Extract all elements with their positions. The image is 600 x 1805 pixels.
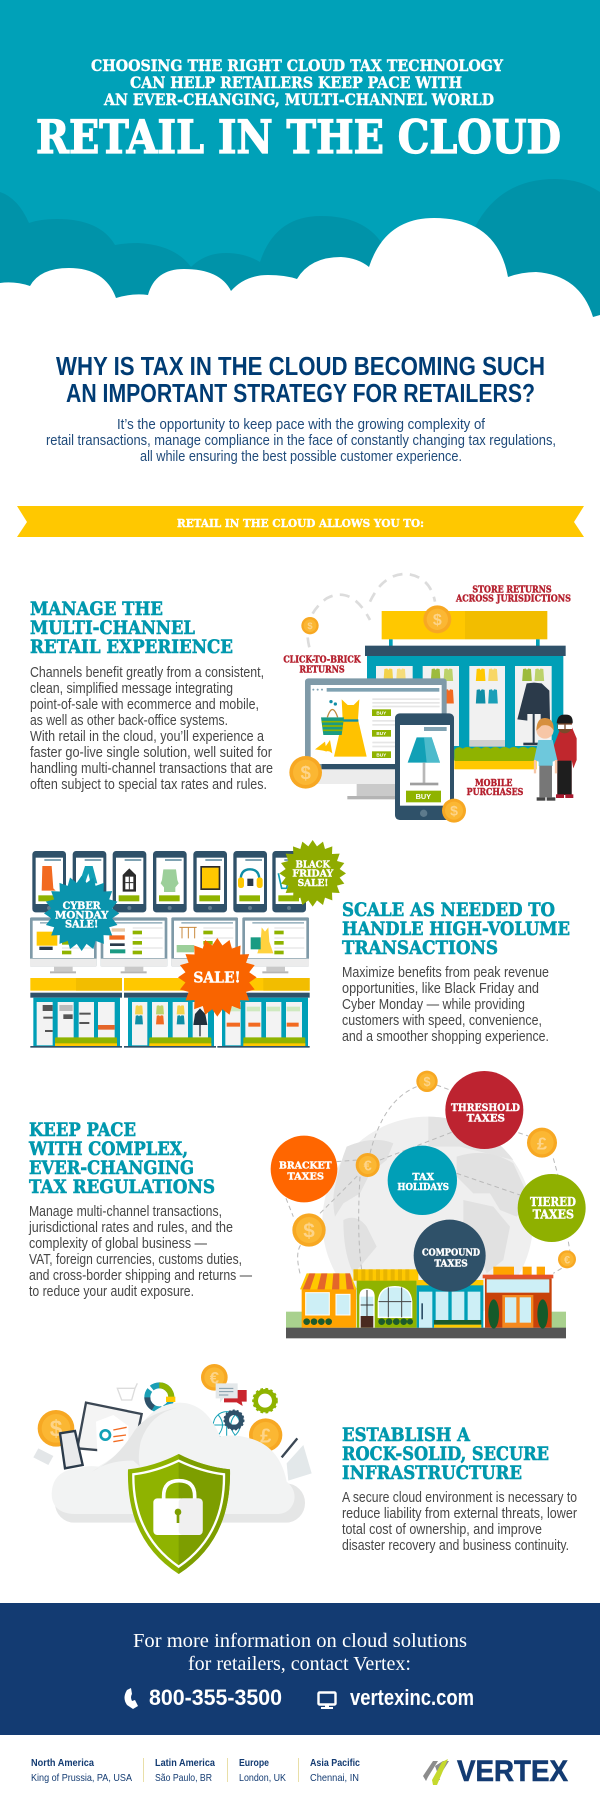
smartphone bbox=[395, 713, 454, 820]
section 2 body: and a smoother shopping experience. bbox=[342, 1029, 549, 1045]
globe bbox=[322, 1117, 533, 1327]
illustration: globe, tax bubbles and shops bbox=[271, 1071, 586, 1338]
europe: Europe bbox=[239, 1757, 269, 1769]
shop: green arched bbox=[353, 1269, 418, 1328]
desktop monitor: BUY bbox=[376, 752, 387, 757]
burst: black friday sale: FRIDAY bbox=[292, 869, 333, 880]
latin america bbox=[155, 1757, 215, 1784]
coins: $ bbox=[300, 762, 311, 783]
coins bbox=[292, 1071, 576, 1268]
label: store returns across jurisdictions: STORE RETURNS bbox=[472, 586, 552, 596]
section 4 text: establish bbox=[342, 1425, 577, 1554]
bubble: tiered taxes: TIERED bbox=[530, 1195, 576, 1209]
icon: monitor bbox=[318, 1692, 336, 1709]
section 1 body: as well as other back-office systems. bbox=[30, 713, 228, 729]
burst: sale bbox=[178, 938, 257, 1017]
section 4 heading: INFRASTRUCTURE bbox=[342, 1463, 522, 1484]
label: mobile purchases bbox=[467, 779, 523, 798]
contact text bbox=[133, 1630, 467, 1675]
section 1 body: Channels benefit greatly from a consistent, bbox=[30, 665, 264, 681]
row of phones bbox=[32, 851, 306, 912]
section 1 body: handling multi-channel transactions that are bbox=[30, 761, 273, 777]
cloud bbox=[52, 1403, 305, 1523]
subtitle: CHOOSING THE RIGHT CLOUD TAX TECHNOLOGY bbox=[91, 56, 504, 75]
section 4 heading: ESTABLISH A bbox=[342, 1425, 471, 1446]
section 2 text: scale as needed bbox=[342, 900, 570, 1045]
latin america: São Paulo, BR bbox=[155, 1772, 212, 1784]
heading: why tax in the cloud bbox=[56, 351, 545, 408]
section 1 text: manage the multi-channel retail experience bbox=[30, 599, 273, 793]
label: click-to-brick returns bbox=[283, 656, 362, 676]
desktop monitor: BUY bbox=[376, 731, 387, 736]
section 3 heading: WITH COMPLEX, bbox=[28, 1139, 188, 1160]
coins and floating icons: € bbox=[210, 1368, 219, 1387]
label: click-to-brick returns: CLICK-TO-BRICK bbox=[283, 656, 362, 666]
bubble: compound taxes bbox=[414, 1220, 486, 1292]
dashed connectors bbox=[286, 1085, 570, 1273]
bubble: tiered taxes bbox=[518, 1174, 586, 1242]
burst: cyber monday sale bbox=[44, 876, 119, 951]
section 1 body: clean, simplified message integrating bbox=[30, 681, 233, 697]
store sign bbox=[382, 611, 547, 646]
subtitle: AN EVER-CHANGING, MULTI-CHANNEL WORLD bbox=[103, 90, 494, 109]
coins: € bbox=[564, 1254, 570, 1266]
asia pacific bbox=[310, 1757, 360, 1784]
section 1 heading: MULTI-CHANNEL bbox=[30, 618, 195, 639]
bubble: compound taxes: COMPOUND bbox=[422, 1248, 480, 1259]
bubble: bracket taxes: BRACKET bbox=[279, 1161, 332, 1172]
section 2 body: Cyber Monday — while providing bbox=[342, 997, 525, 1013]
coins: £ bbox=[537, 1133, 547, 1153]
section 3 body bbox=[28, 1204, 252, 1300]
section 1 body: often subject to special tax rates and rules. bbox=[30, 777, 267, 793]
label: store returns across jurisdictions bbox=[455, 586, 571, 605]
burst: sale: SALE! bbox=[193, 969, 241, 987]
section 3 heading: KEEP PACE bbox=[29, 1120, 136, 1141]
burst: black friday sale: SALE! bbox=[298, 878, 328, 889]
section 3 heading bbox=[28, 1120, 215, 1198]
shield with lock bbox=[128, 1454, 230, 1574]
bubble: compound taxes: TAXES bbox=[434, 1259, 468, 1270]
section 1 heading: MANAGE THE bbox=[30, 599, 163, 620]
section 4 body bbox=[342, 1490, 577, 1554]
burst: cyber monday sale: SALE! bbox=[65, 919, 98, 931]
section 3 body: VAT, foreign currencies, customs duties, bbox=[29, 1252, 242, 1268]
coins: $ bbox=[423, 1075, 431, 1089]
bubble: threshold taxes: THRESHOLD bbox=[451, 1102, 520, 1114]
shop: teal bbox=[417, 1280, 483, 1328]
section 3 heading: TAX REGULATIONS bbox=[29, 1177, 215, 1198]
section 1 body: point-of-sale with ecommerce and mobile, bbox=[30, 697, 259, 713]
bubble: tax holidays bbox=[388, 1146, 457, 1215]
contact text: For more information on cloud solutions bbox=[133, 1630, 467, 1652]
asia pacific: Asia Pacific bbox=[310, 1757, 360, 1769]
panel: hero header bbox=[0, 0, 600, 340]
bubble: threshold taxes bbox=[445, 1071, 523, 1149]
section 1 body bbox=[30, 665, 273, 793]
bubble: threshold taxes: TAXES bbox=[467, 1113, 505, 1125]
label: store returns across jurisdictions: ACROSS JURISDICTIONS bbox=[455, 595, 571, 605]
section 4 heading bbox=[342, 1425, 549, 1484]
intro text: all while ensuring the best possible customer experience. bbox=[140, 449, 462, 465]
desktop monitor bbox=[305, 678, 447, 799]
section 2 body bbox=[342, 965, 549, 1045]
website: vertexinc.com bbox=[350, 1685, 474, 1710]
north america bbox=[31, 1757, 132, 1784]
ribbon banner bbox=[17, 506, 584, 537]
intro text bbox=[46, 417, 556, 465]
europe bbox=[239, 1757, 286, 1784]
icon: phone bbox=[124, 1688, 138, 1709]
logo: vertex: VERTEX bbox=[457, 1755, 568, 1788]
section 2 body: Maximize benefits from peak revenue bbox=[342, 965, 549, 981]
row of storefronts bbox=[30, 978, 310, 1048]
shop: red-orange bbox=[483, 1267, 553, 1329]
burst: black friday sale: BLACK bbox=[296, 859, 331, 870]
section 3 text: keep pace bbox=[28, 1120, 252, 1300]
section 2 heading bbox=[342, 900, 570, 959]
ribbon banner: RETAIL IN THE CLOUD ALLOWS YOU TO: bbox=[177, 516, 424, 530]
subtitle bbox=[91, 56, 504, 109]
section 3 heading: EVER-CHANGING bbox=[29, 1158, 194, 1179]
section 4 heading: ROCK-SOLID, SECURE bbox=[342, 1444, 549, 1465]
illustration: devices, stores and sale bursts bbox=[30, 840, 346, 1048]
section 2 heading: HANDLE HIGH-VOLUME bbox=[342, 919, 570, 940]
bubble: tiered taxes: TAXES bbox=[533, 1208, 574, 1222]
illustration: secure cloud with shield bbox=[33, 1364, 312, 1574]
asia pacific: Chennai, IN bbox=[310, 1772, 359, 1784]
bubble: tax holidays: TAX bbox=[412, 1172, 435, 1183]
intro text: It’s the opportunity to keep pace with the growing complexity of bbox=[117, 417, 486, 433]
bubble: bracket taxes bbox=[271, 1136, 337, 1202]
section 3 body: to reduce your audit exposure. bbox=[29, 1284, 194, 1300]
phone number: 800-355-3500 bbox=[149, 1685, 282, 1710]
coins bbox=[289, 605, 466, 823]
burst: cyber monday sale: MONDAY bbox=[55, 909, 109, 921]
section 2 heading: TRANSACTIONS bbox=[342, 938, 498, 959]
section 3 body: Manage multi-channel transactions, bbox=[29, 1204, 222, 1220]
section 3 body: and cross-border shipping and returns — bbox=[29, 1268, 252, 1284]
section 3 body: jurisdictional rates and rules, and the bbox=[28, 1220, 233, 1236]
storefront bbox=[365, 646, 566, 769]
bubble: tax holidays: HOLIDAYS bbox=[397, 1182, 449, 1193]
europe: London, UK bbox=[239, 1772, 286, 1784]
coins: $ bbox=[433, 612, 442, 629]
section 3 body: complexity of global business — bbox=[29, 1236, 207, 1252]
coins and floating icons: £ bbox=[260, 1426, 271, 1448]
section 2 body: opportunities, like Black Friday and bbox=[342, 981, 539, 997]
label: mobile purchases: MOBILE bbox=[475, 779, 512, 789]
contact band bbox=[0, 1603, 600, 1735]
row of monitors bbox=[30, 917, 309, 973]
subtitle: CAN HELP RETAILERS KEEP PACE WITH bbox=[130, 73, 462, 92]
section 1 body: faster go-live single solution, well suited for bbox=[30, 745, 272, 761]
smartphone: BUY bbox=[416, 792, 431, 801]
coins: $ bbox=[307, 621, 313, 631]
contact text: for retailers, contact Vertex: bbox=[188, 1653, 411, 1675]
burst: cyber monday sale: CYBER bbox=[63, 900, 101, 912]
section 4 body: total cost of ownership, and improve bbox=[342, 1522, 542, 1538]
coins and floating icons bbox=[33, 1364, 312, 1481]
north america: North America bbox=[31, 1757, 94, 1769]
grass and road bbox=[286, 1312, 566, 1338]
coins and floating icons: $ bbox=[50, 1416, 63, 1442]
label: mobile purchases: PURCHASES bbox=[467, 788, 523, 798]
section 2 heading: SCALE AS NEEDED TO bbox=[342, 900, 555, 921]
burst: black friday sale bbox=[279, 840, 346, 907]
north america: King of Prussia, PA, USA bbox=[31, 1772, 132, 1784]
section 1 heading bbox=[30, 599, 233, 658]
coins: € bbox=[364, 1158, 372, 1174]
coins: $ bbox=[303, 1220, 315, 1243]
illustration: storefront, monitor and phone bbox=[283, 574, 577, 823]
office locations bbox=[31, 1757, 360, 1784]
latin america: Latin America bbox=[155, 1757, 215, 1769]
section 1 heading: RETAIL EXPERIENCE bbox=[30, 637, 233, 658]
coins: $ bbox=[450, 803, 458, 819]
section 2 body: customers with speed, convenience, bbox=[342, 1013, 542, 1029]
shop: orange awning bbox=[300, 1273, 357, 1328]
desktop monitor: BUY bbox=[376, 710, 387, 715]
bubble: bracket taxes: TAXES bbox=[287, 1171, 324, 1182]
section 1 body: With retail in the cloud, you’ll experience a bbox=[30, 729, 265, 745]
people bbox=[534, 715, 577, 801]
label: click-to-brick returns: RETURNS bbox=[299, 666, 345, 676]
